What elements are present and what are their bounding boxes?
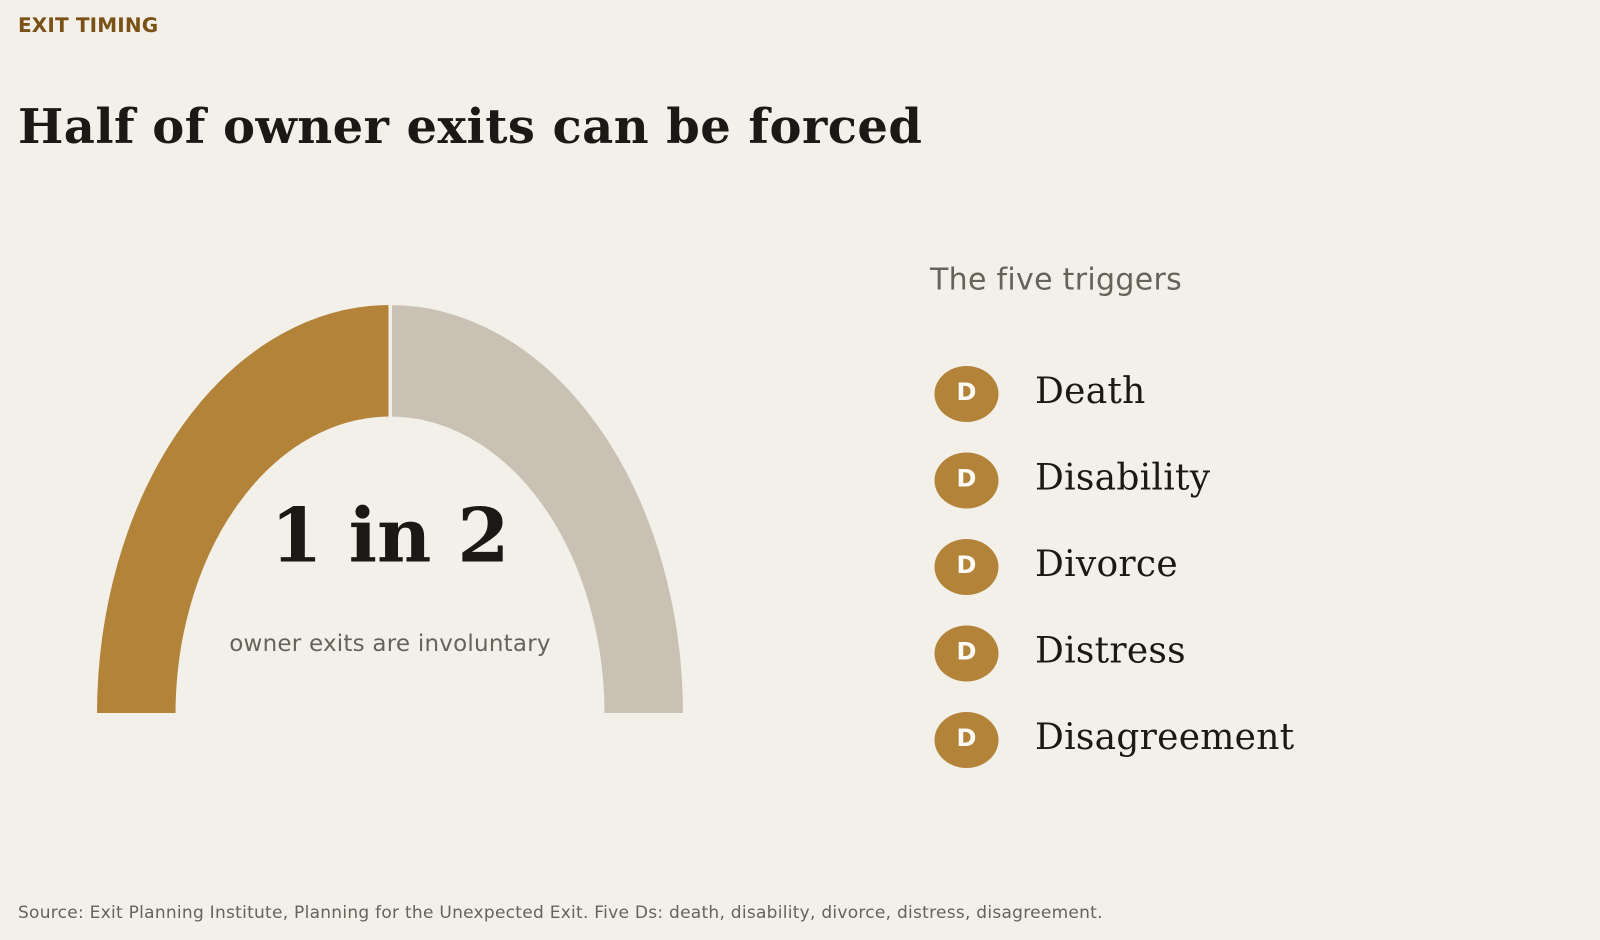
title: Half of owner exits can be forced	[18, 99, 922, 155]
trigger: Divorce: D	[957, 551, 976, 579]
gauge segment: remaining half	[390, 304, 685, 714]
trigger: Disability: D	[957, 464, 976, 492]
trigger: Death: D	[957, 378, 976, 406]
trigger: Disagreement: D	[957, 724, 976, 752]
source note: Source: Exit Planning Institute, Planning for the Unexpected Exit. Five Ds: death, disability, divorce, distress, disagreement.	[18, 903, 1103, 923]
trigger: Distress	[934, 626, 1186, 682]
trigger: Death	[934, 366, 1146, 422]
statistic caption: owner exits are involuntary	[229, 631, 551, 657]
list heading: The five triggers	[929, 262, 1182, 298]
trigger: Death: Death	[1035, 371, 1146, 412]
list: five triggers	[934, 366, 1295, 768]
trigger: Divorce: Divorce	[1035, 544, 1178, 585]
trigger: Disability	[934, 452, 1211, 508]
big statistic: 1 in 2	[271, 492, 509, 580]
trigger: Disagreement	[934, 712, 1295, 768]
eyebrow label: EXIT TIMING	[18, 13, 158, 37]
trigger: Disagreement: Disagreement	[1035, 717, 1295, 758]
trigger: Disability: Disability	[1035, 458, 1211, 498]
gauge segment: involuntary half	[96, 304, 390, 714]
trigger: Distress: D	[957, 638, 976, 666]
trigger: Divorce	[934, 539, 1178, 595]
trigger: Distress: Distress	[1035, 630, 1186, 672]
half-donut gauge chart	[96, 300, 685, 714]
